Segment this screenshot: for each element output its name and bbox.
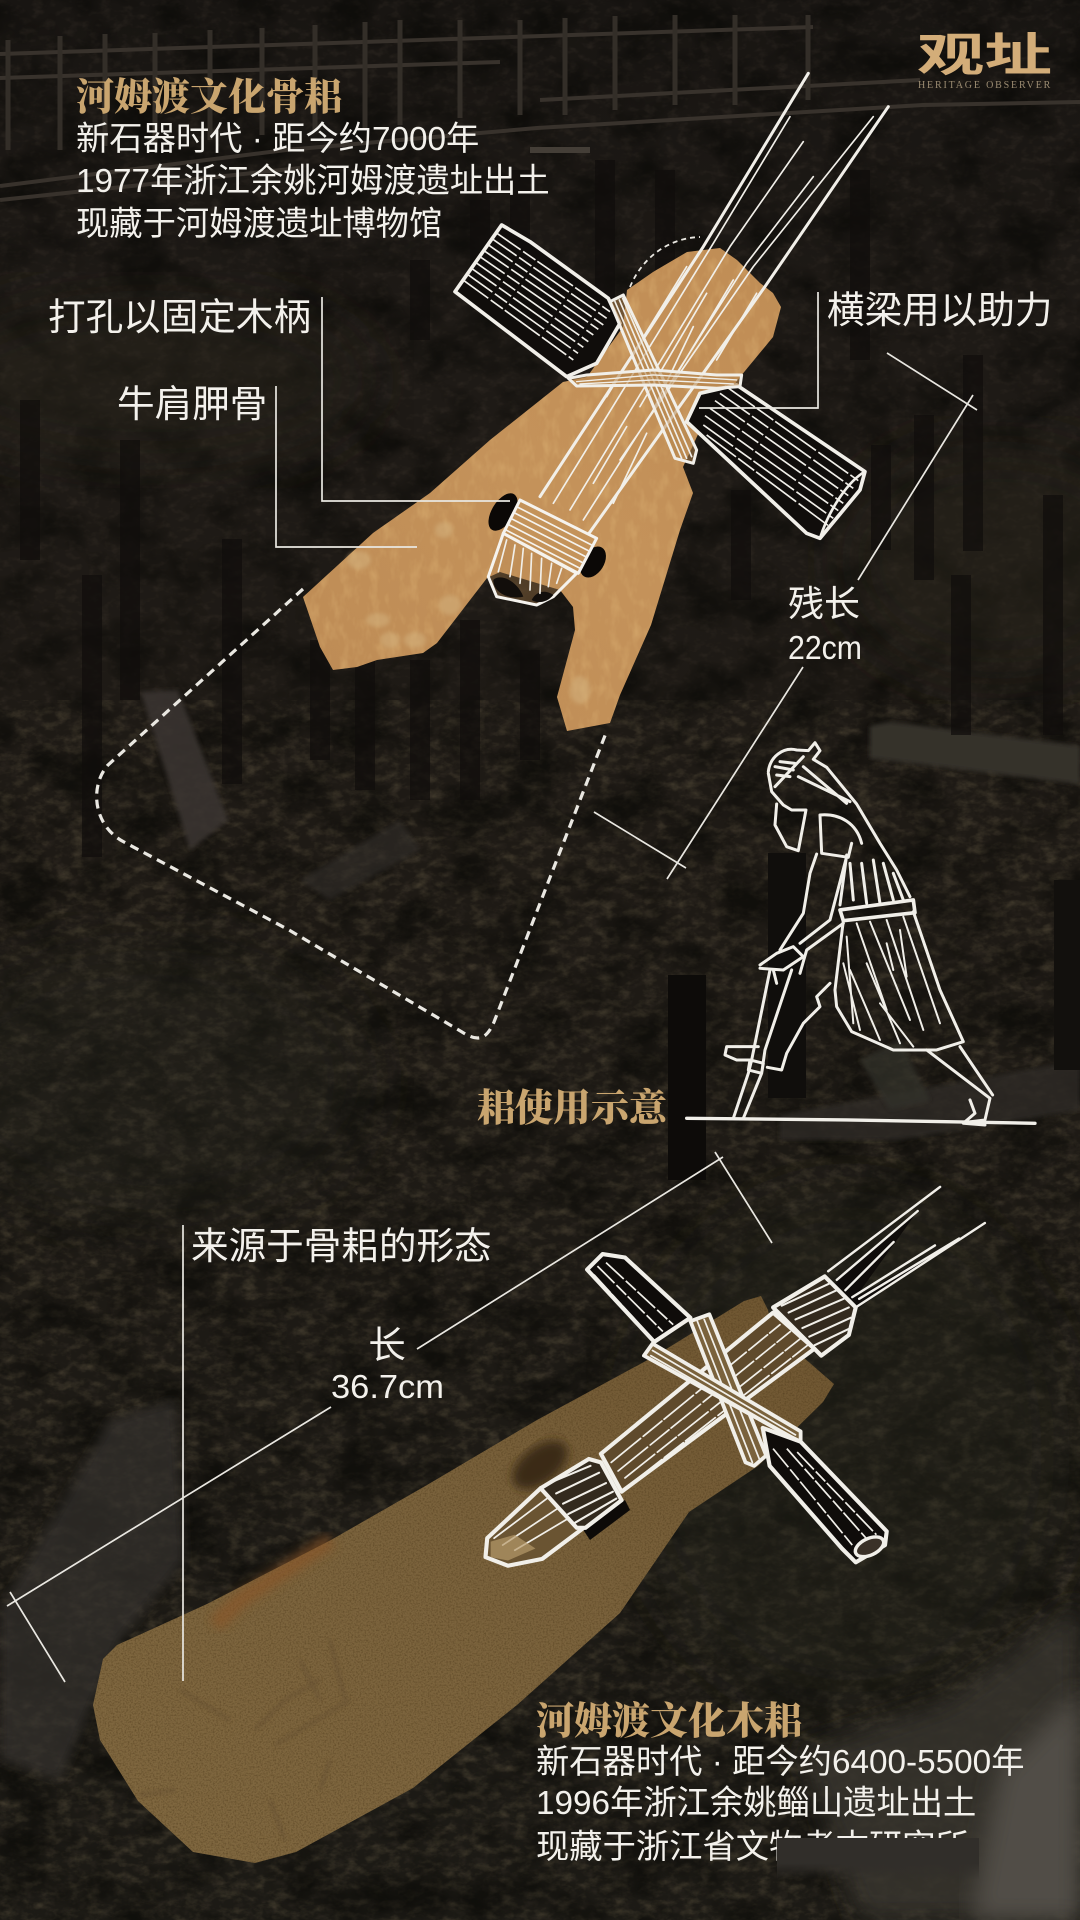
belt	[840, 900, 915, 921]
crossbeam	[587, 1254, 887, 1562]
crossbeam upper	[455, 225, 620, 377]
leader: 打孔以固定木柄	[322, 297, 510, 501]
dimension: remaining length 22cm: 22cm	[788, 630, 862, 667]
arms and hand	[760, 857, 847, 983]
shaft	[601, 1313, 814, 1492]
heading block: wooden si: 现藏于浙江省文物考古研究所	[536, 1829, 969, 1866]
dimension: remaining length 22cm: 残长	[788, 583, 860, 624]
label: 来源于骨耜的形态: 来源于骨耜的形态	[191, 1225, 492, 1267]
illustration: dashed top outline	[630, 237, 700, 287]
logo: 观址 Heritage Observer: 观址	[917, 30, 1052, 81]
wood marks	[140, 1640, 350, 1840]
heading block: bone si	[76, 77, 550, 243]
lower wrap	[541, 1459, 622, 1528]
label: 打孔以固定木柄: 打孔以固定木柄	[48, 296, 311, 338]
fence	[0, 27, 1080, 200]
torso	[780, 815, 903, 950]
spade holes	[504, 1431, 576, 1499]
illustration: handle and crossbeam on wooden spade	[485, 1187, 985, 1566]
rocks and logs	[0, 1400, 185, 1780]
leader: 来源于骨耜的形态	[182, 1225, 184, 1681]
ground line	[687, 1118, 1035, 1123]
strap diagonal	[610, 295, 697, 463]
leader: 牛肩胛骨	[276, 386, 417, 547]
wooden handle lines	[540, 73, 888, 537]
artifact: wooden spade	[93, 1296, 834, 1863]
heading block: bone si: 河姆渡文化骨耜	[76, 77, 342, 119]
straps	[644, 1314, 801, 1466]
label: 横梁用以助力: 横梁用以助力	[827, 289, 1052, 331]
leader: 横梁用以助力	[699, 292, 818, 408]
tip	[485, 1488, 584, 1566]
spade handle	[733, 970, 792, 1118]
illustration: lower binding and handle tip on bone spade	[488, 500, 597, 605]
heading block: wooden si: 新石器时代 · 距今约6400-5500年	[536, 1744, 1024, 1781]
dimension: length 36.7cm: 长	[368, 1324, 406, 1366]
dimension: remaining length 22cm	[594, 353, 977, 879]
head and hair	[768, 743, 910, 897]
skirt	[835, 912, 963, 1050]
dimension: length 36.7cm: 36.7cm	[331, 1369, 444, 1406]
heading block: bone si: 1977年浙江余姚河姆渡遗址出土	[76, 163, 550, 200]
stakes	[30, 160, 1053, 857]
strap horizontal	[568, 370, 742, 388]
illustration: dashed reconstructed outline	[97, 589, 606, 1038]
illustration: handle and crossbeam on bone spade	[455, 73, 888, 538]
logo: 观址 Heritage Observer: HERITAGE OBSERVER	[918, 80, 1052, 91]
heading block: bone si: 新石器时代 · 距今约7000年	[76, 121, 479, 158]
legs and feet	[725, 923, 993, 1125]
heading block: wooden si	[536, 1701, 1024, 1866]
heading block: wooden si: 河姆渡文化木耜	[536, 1701, 802, 1743]
upper wrap	[773, 1276, 856, 1356]
spikes	[828, 1187, 985, 1307]
illustration: person using the si	[687, 743, 1035, 1125]
artifact: bone spade	[303, 248, 781, 731]
heading block: bone si: 现藏于河姆渡遗址博物馆	[76, 206, 442, 243]
crossbeam lower	[687, 385, 865, 538]
label: 牛肩胛骨: 牛肩胛骨	[117, 383, 267, 425]
bone spots	[347, 522, 590, 704]
dimension: length 36.7cm	[7, 1152, 772, 1682]
heading block: wooden si: 1996年浙江余姚鲻山遗址出土	[536, 1785, 976, 1822]
bone holes	[483, 488, 611, 582]
caption: 耜使用示意: 耜使用示意	[477, 1087, 670, 1130]
watermark cover patch	[777, 1838, 979, 1880]
